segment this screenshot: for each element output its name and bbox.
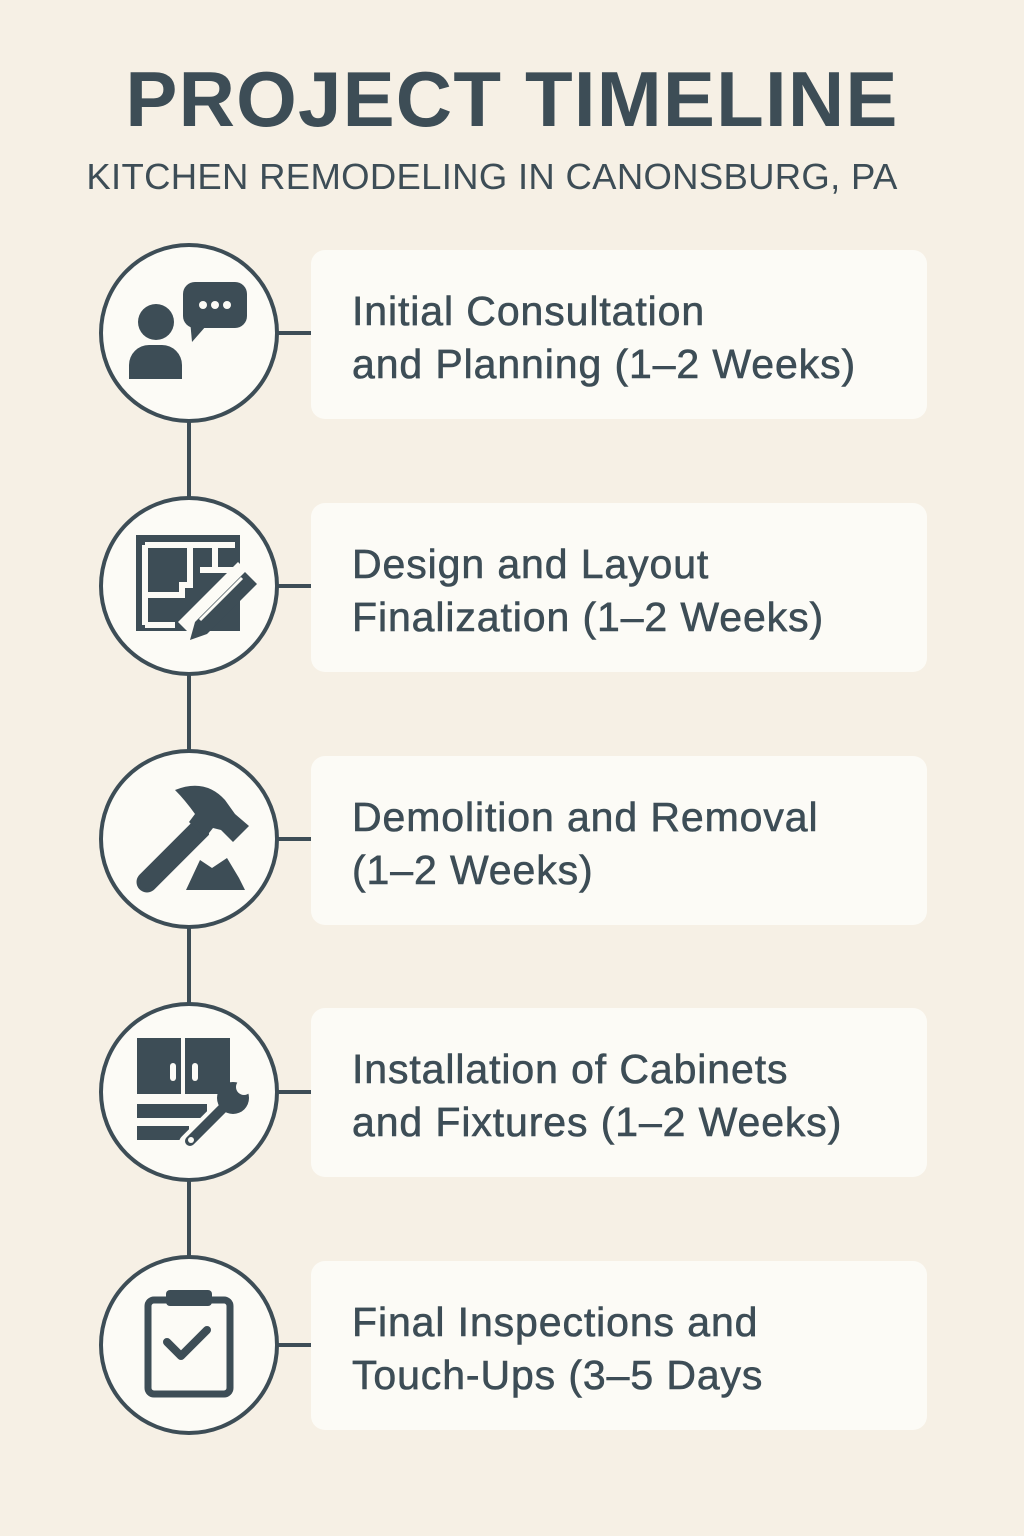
- card: step 1: [311, 250, 927, 419]
- icon: cabinets with wrench: [137, 1038, 252, 1143]
- icon: floor plan: [136, 535, 257, 640]
- card: step 5: Touch-Ups (3–5 Days: [352, 1352, 763, 1398]
- card: step 2: [311, 503, 927, 672]
- icon: clipboard check: [148, 1290, 230, 1394]
- icon: hammer: [139, 786, 249, 890]
- card: step 3: (1–2 Weeks): [352, 847, 594, 893]
- card: step 5: Final Inspections and: [352, 1299, 758, 1345]
- card: step 4: and Fixtures (1–2 Weeks): [352, 1099, 842, 1145]
- card: step 3: Demolition and Removal: [352, 794, 818, 840]
- card: step 2: Finalization (1–2 Weeks): [352, 594, 824, 640]
- card: step 4: [311, 1008, 927, 1177]
- card: step 1: Initial Consultation: [352, 288, 705, 334]
- card: step 5: [311, 1261, 927, 1430]
- card: step 3: [311, 756, 927, 925]
- card: step 2: Design and Layout: [352, 541, 709, 587]
- subtitle: KITCHEN REMODELING IN CANONSBURG, PA: [86, 156, 898, 197]
- card: step 4: Installation of Cabinets: [352, 1046, 788, 1092]
- icon: consultation: [129, 282, 247, 379]
- card: step 1: and Planning (1–2 Weeks): [352, 341, 856, 387]
- title: PROJECT TIMELINE: [125, 55, 899, 143]
